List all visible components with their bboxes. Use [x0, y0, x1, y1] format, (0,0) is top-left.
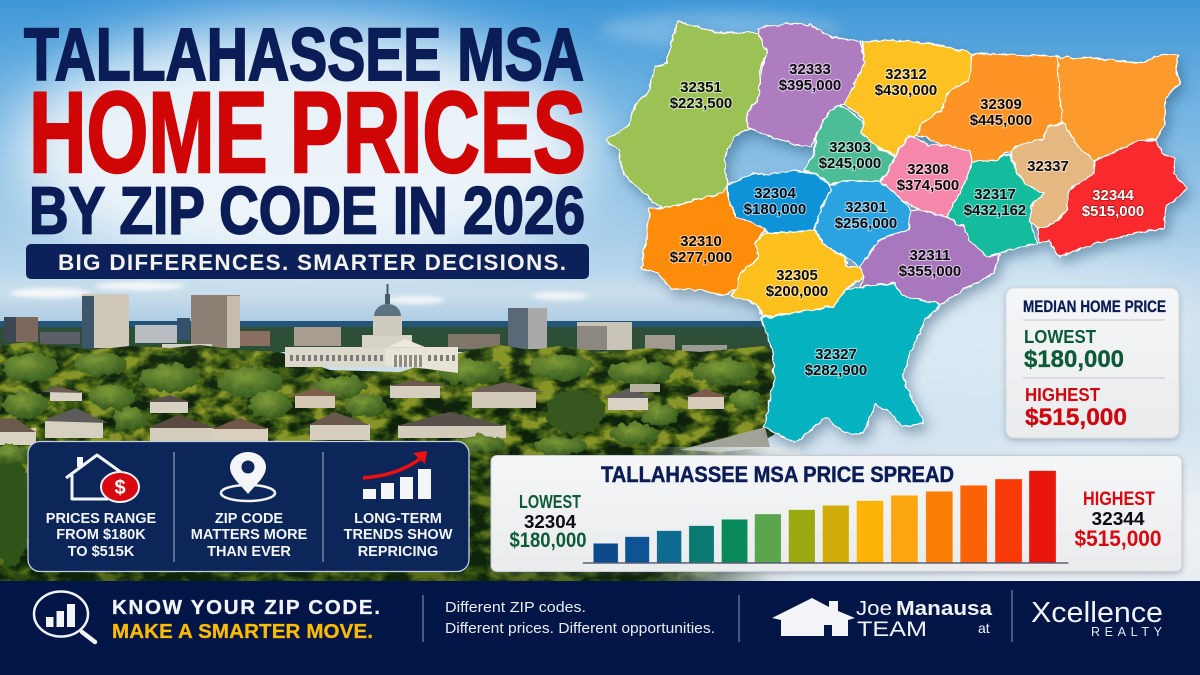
- photo: Tallahassee skyline and neighborhood: [0, 270, 800, 582]
- label 32305: $200,000: [766, 283, 828, 300]
- tagline: Different ZIP codes.: [445, 599, 586, 616]
- highest callout: HIGHEST: [1083, 489, 1155, 510]
- label 32333: 32333: [789, 61, 831, 78]
- label 32337: 32337: [1027, 158, 1069, 175]
- map labels: [670, 61, 1144, 379]
- label 32301: 32301: [845, 199, 887, 216]
- forest: [0, 326, 800, 582]
- tagline: [445, 599, 715, 637]
- logo: Joe Manausa Team: Manausa: [896, 598, 993, 620]
- region 32333: [746, 23, 865, 147]
- region 32308: [879, 136, 973, 217]
- region northeast unlabeled: [1057, 55, 1180, 160]
- skyline buildings: [4, 294, 727, 356]
- horizon sky: [0, 270, 780, 328]
- distant treeline: [0, 321, 775, 352]
- text: long-term trends: TRENDS SHOW: [344, 527, 453, 543]
- label 32344: 32344: [1092, 187, 1135, 204]
- label 32311: 32311: [910, 247, 950, 264]
- label 32308: $374,500: [897, 177, 959, 194]
- region 32337: [1009, 123, 1096, 228]
- text: zip code matters: MATTERS MORE: [191, 527, 308, 543]
- text: prices range: PRICES RANGE: [46, 511, 157, 527]
- region 32344: [1038, 140, 1187, 257]
- label 32309: 32309: [980, 96, 1022, 113]
- title line 3: BY ZIP CODE IN 2026: [29, 174, 585, 248]
- label 32303: $245,000: [819, 155, 881, 172]
- logo: Joe Manausa Team: TEAM: [857, 618, 927, 641]
- highest value: $515,000: [1025, 404, 1127, 431]
- label 32303: 32303: [829, 139, 871, 156]
- trees in front of houses: [0, 390, 659, 568]
- label 32301: $256,000: [835, 215, 897, 232]
- label 32304: 32304: [754, 185, 797, 202]
- label 32312: 32312: [885, 66, 927, 83]
- label 32308: 32308: [907, 161, 949, 178]
- label 32317: $432,162: [964, 202, 1026, 219]
- title line 1: TALLAHASSEE MSA: [24, 13, 584, 96]
- icon: magnifier with bars: [34, 592, 95, 642]
- region 32301: [814, 180, 912, 267]
- call to action: MAKE A SMARTER MOVE.: [112, 620, 373, 643]
- text: prices range: FROM $180K: [56, 527, 146, 543]
- call to action: [112, 596, 380, 643]
- highest callout: [1074, 489, 1162, 551]
- ZIP code map: [606, 22, 1187, 443]
- label 32312: $430,000: [875, 82, 937, 99]
- label 32327: 32327: [815, 346, 857, 363]
- label 32305: 32305: [776, 267, 818, 284]
- title: [24, 13, 586, 248]
- region 32327: [761, 283, 941, 443]
- text: prices range: TO $515K: [68, 544, 135, 560]
- label 32327: $282,900: [805, 362, 867, 379]
- icon: rising bars with arrow: [363, 451, 431, 499]
- bar chart: [583, 471, 1068, 564]
- lowest callout: [510, 492, 586, 552]
- lowest label: LOWEST: [1024, 326, 1097, 347]
- lowest callout: 32304: [524, 512, 576, 532]
- panel: key takeaways: [28, 442, 469, 572]
- label 32311: $355,000: [899, 263, 961, 280]
- label 32310: 32310: [680, 233, 722, 250]
- label 32351: 32351: [680, 79, 722, 96]
- text: zip code matters: ZIP CODE: [215, 511, 283, 527]
- right fade: [650, 447, 800, 582]
- subtitle banner: BIG DIFFERENCES. SMARTER DECISIONS.: [58, 250, 566, 275]
- highest callout: $515,000: [1074, 526, 1162, 551]
- region 32303: [803, 105, 895, 185]
- footer bar: [0, 581, 1200, 675]
- icon: house with dollar coin: $: [114, 477, 126, 499]
- label 32304: $180,000: [744, 201, 806, 218]
- lowest callout: $180,000: [510, 529, 586, 552]
- houses: [0, 380, 728, 445]
- label 32351: $223,500: [670, 95, 732, 112]
- region 32317: [946, 153, 1043, 257]
- panel: median home price: [1006, 288, 1179, 438]
- region 32312: [845, 40, 973, 155]
- text: long-term trends: REPRICING: [358, 544, 438, 560]
- region 32305: [730, 230, 864, 317]
- call to action: KNOW YOUR ZIP CODE.: [112, 596, 380, 619]
- lowest value: $180,000: [1024, 346, 1124, 373]
- panel heading: MEDIAN HOME PRICE: [1023, 297, 1166, 316]
- region 32304: [728, 170, 832, 233]
- highest label: HIGHEST: [1025, 384, 1101, 405]
- panel: price spread: [491, 456, 1182, 572]
- state capitol: [285, 284, 458, 373]
- label 32309: $445,000: [970, 112, 1032, 129]
- label 32317: 32317: [974, 186, 1016, 203]
- label 32310: $277,000: [670, 249, 732, 266]
- logo: Xcellence Realty: Xcellence: [1031, 597, 1163, 629]
- region 32310: [640, 185, 765, 295]
- label 32333: $395,000: [779, 77, 841, 94]
- panel title: TALLAHASSEE MSA PRICE SPREAD: [601, 462, 954, 487]
- region 32311: [860, 210, 1000, 305]
- highest callout: 32344: [1092, 509, 1144, 529]
- icon: map pin: [221, 452, 275, 501]
- text: long-term trends: LONG-TERM: [354, 511, 442, 527]
- logo: Joe Manausa Team: at: [978, 620, 990, 636]
- road: [680, 427, 770, 452]
- logo: Joe Manausa Team: Joe: [856, 598, 892, 620]
- text: zip code matters: THAN EVER: [207, 544, 291, 560]
- icon: house with dollar coin: [66, 455, 139, 502]
- tagline: Different prices. Different opportunities.: [445, 620, 715, 637]
- logo: Joe Manausa Team: [772, 598, 993, 641]
- lowest callout: LOWEST: [519, 492, 581, 512]
- subtitle banner: [26, 244, 589, 279]
- title line 2: HOME PRICES: [29, 69, 586, 197]
- region 32309: [918, 53, 1063, 162]
- region 32351: [606, 22, 766, 208]
- label 32344: $515,000: [1082, 203, 1144, 220]
- tree canopies behind houses: [2, 352, 761, 429]
- logo: Xcellence Realty: REALTY: [1091, 625, 1163, 639]
